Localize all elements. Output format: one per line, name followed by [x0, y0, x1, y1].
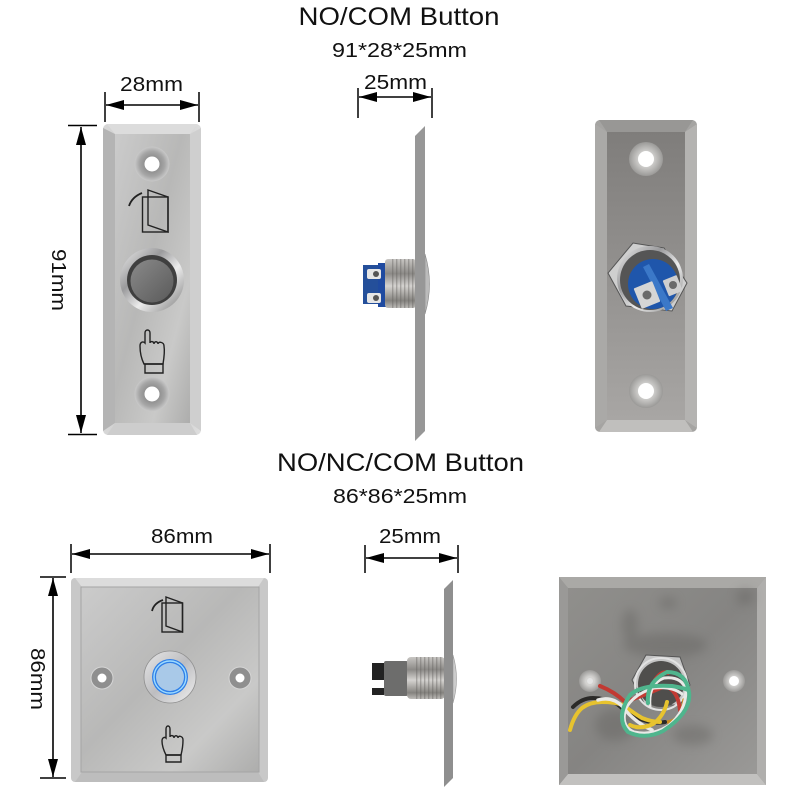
left mounting hole — [91, 667, 113, 689]
rust stains — [595, 589, 754, 745]
dimension: 86mm height: 86mm — [26, 648, 48, 710]
panel: NO/NC/COM button back — [559, 577, 766, 785]
threaded body — [407, 657, 445, 699]
heading: NO/NC/COM Button: NO/NC/COM Button — [277, 449, 524, 477]
dimension: 91mm height — [47, 126, 97, 434]
icon: pushing hand — [162, 726, 183, 762]
panel: NO/COM button front — [103, 124, 201, 435]
bottom mounting hole — [134, 376, 170, 412]
icon: open door — [129, 190, 168, 232]
black connector — [372, 663, 384, 695]
dimension: 25mm depth — [358, 72, 432, 118]
button dome — [453, 655, 456, 703]
panel: NO/NC/COM button side view — [372, 580, 456, 787]
icon: open door — [152, 597, 182, 632]
illuminated LED button — [144, 651, 196, 703]
right mounting hole — [723, 670, 745, 692]
heading: NO/COM Button: NO/COM Button — [298, 3, 500, 31]
coloured wires — [570, 672, 689, 736]
side plate — [415, 126, 425, 441]
dimension: 86mm height — [26, 577, 66, 778]
dimension: 86mm width: 86mm — [151, 526, 213, 548]
subheading: 91*28*25mm: 91*28*25mm — [332, 40, 467, 62]
top mounting hole — [134, 146, 170, 182]
top mounting hole — [629, 142, 663, 176]
dimension: 25mm depth — [365, 526, 458, 573]
dimension: 25mm depth: 25mm — [379, 526, 441, 548]
right mounting hole — [229, 667, 251, 689]
blue terminal block — [363, 263, 386, 307]
panel: NO/COM button back — [595, 120, 697, 432]
dimension: 28mm width — [105, 74, 199, 122]
threaded body — [385, 259, 416, 308]
nut — [632, 655, 690, 710]
bottom mounting hole — [629, 374, 663, 408]
dimension: 25mm depth: 25mm — [364, 72, 427, 94]
hex nut and terminals — [608, 243, 687, 312]
side plate — [444, 580, 453, 787]
dimension: 91mm height: 91mm — [47, 249, 69, 311]
left mounting hole — [579, 670, 601, 692]
button dome — [425, 254, 430, 314]
push button — [120, 248, 184, 312]
panel: NO/COM button side view — [363, 126, 430, 441]
grey collar — [384, 661, 408, 696]
subheading: 86*86*25mm: 86*86*25mm — [333, 486, 467, 508]
panel: NO/NC/COM button front — [71, 578, 268, 782]
dimension: 86mm width — [71, 526, 270, 573]
icon: pushing hand — [140, 330, 164, 373]
dimension: 28mm width: 28mm — [120, 74, 183, 96]
